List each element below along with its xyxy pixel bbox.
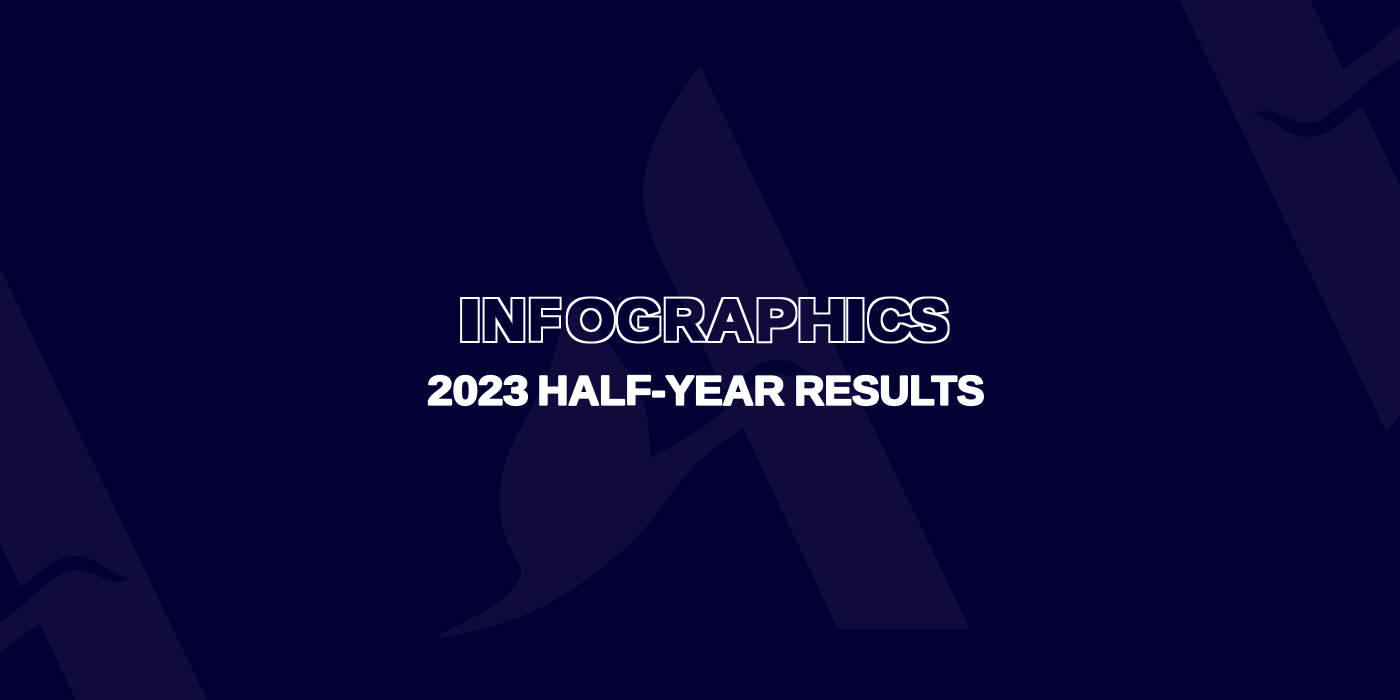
title: outlined heading: C <box>868 289 910 353</box>
title: outlined heading: I <box>845 289 866 353</box>
title: outlined heading: S <box>910 289 948 353</box>
title: outlined heading: P <box>756 289 796 353</box>
title: outlined heading: R <box>664 289 704 353</box>
title: outlined heading: H <box>798 289 846 353</box>
title: outlined heading: A <box>708 289 752 353</box>
subtitle: RESULTS <box>794 367 984 413</box>
title: outlined heading: G <box>617 289 661 353</box>
watermark: top-right logo <box>1179 0 1400 431</box>
title: outlined heading: N <box>482 289 526 353</box>
title: outlined heading: I <box>459 289 481 353</box>
watermark: central logo <box>439 66 970 637</box>
title: outlined heading: O <box>567 289 615 353</box>
subtitle: HALF-YEAR <box>538 367 784 413</box>
subtitle: 2023 <box>428 367 528 413</box>
title: outlined heading: F <box>529 289 560 353</box>
watermark: bottom-left logo <box>0 268 207 700</box>
